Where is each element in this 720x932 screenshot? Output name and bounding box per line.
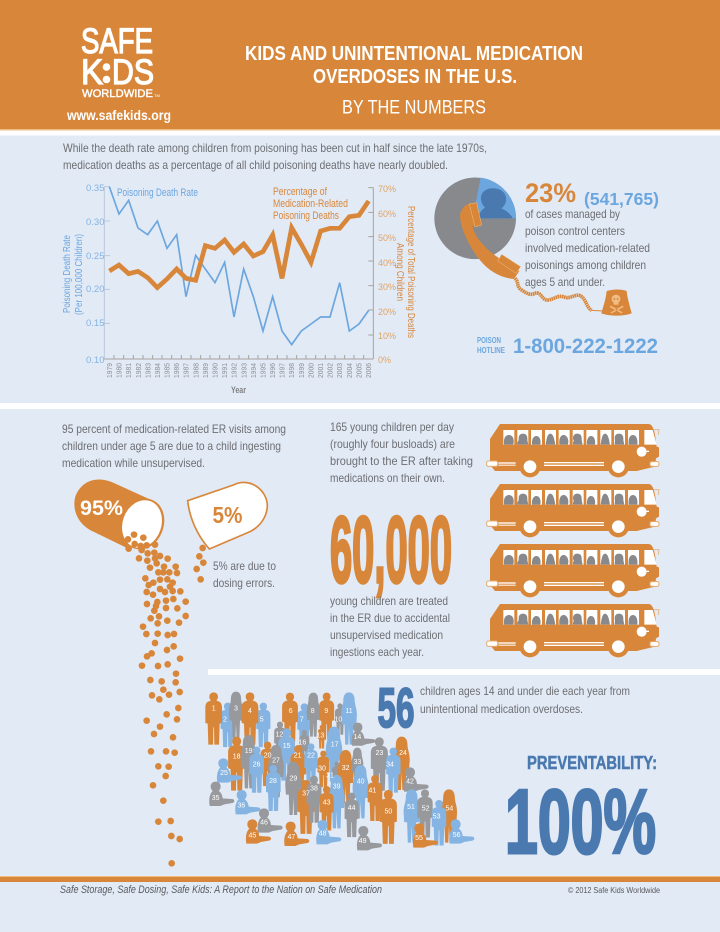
stat: 56: 56 bbox=[378, 676, 414, 739]
spilled dots bbox=[125, 531, 207, 669]
intro text: medication deaths as a percentage of all child poisoning deaths have nearly doubled. bbox=[63, 158, 448, 172]
child number labels: 29 bbox=[289, 776, 297, 783]
year labels: 2004 bbox=[345, 363, 354, 378]
icon: pills spilling bbox=[74, 479, 267, 867]
left axis tick labels: 0.25 bbox=[86, 251, 104, 262]
year labels: 2006 bbox=[364, 363, 373, 378]
title: KIDS AND UNINTENTIONAL MEDICATION bbox=[245, 42, 583, 65]
text: dosing errors: 5% are due to bbox=[213, 559, 276, 573]
poison hotline: HOTLINE bbox=[477, 345, 505, 355]
year labels: 1984 bbox=[153, 363, 162, 378]
icon: phone cord bbox=[515, 278, 592, 310]
year labels: 1987 bbox=[182, 363, 191, 378]
icon: child head bbox=[478, 188, 513, 218]
year labels: 1991 bbox=[220, 363, 229, 378]
year labels: 1985 bbox=[163, 363, 172, 378]
citation: Safe Storage, Safe Dosing, Safe Kids: A Report to the Nation on Safe Medication bbox=[60, 884, 382, 896]
text: 95 percent bbox=[62, 422, 286, 470]
icon: bus 1 bbox=[487, 424, 659, 477]
year labels: 1983 bbox=[143, 363, 152, 378]
series label: medication: Medication-Related bbox=[273, 198, 348, 210]
right axis tick labels: 50% bbox=[378, 233, 396, 243]
right axis tick labels: 60% bbox=[378, 209, 396, 219]
orange capsule half bbox=[74, 479, 171, 556]
logo: Safe Kids Worldwide: WORLDWIDE bbox=[82, 88, 153, 100]
child number labels: 17 bbox=[331, 742, 339, 749]
child number labels: 47 bbox=[287, 834, 295, 841]
lower divider bbox=[208, 669, 720, 675]
child number labels: 52 bbox=[422, 805, 430, 812]
year labels: 1990 bbox=[210, 363, 220, 378]
pie chart with phone illustration bbox=[434, 177, 632, 316]
x axis title: Year bbox=[231, 385, 246, 396]
text: 95 percent: children under age 5 are due to a child ingesting bbox=[62, 439, 281, 453]
text: 95 percent: medication while unsupervised. bbox=[62, 456, 205, 470]
year labels: 1999 bbox=[297, 363, 306, 378]
text: 60,000 description: unsupervised medication bbox=[330, 628, 443, 642]
child number labels: 18 bbox=[233, 753, 241, 760]
child number labels: 43 bbox=[323, 800, 331, 807]
right axis tick labels: 30% bbox=[378, 282, 396, 292]
text: 60,000 description: ingestions each year. bbox=[330, 645, 424, 659]
left axis title bbox=[62, 234, 85, 315]
child number labels: 53 bbox=[433, 813, 441, 820]
left axis tick labels: 0.35 bbox=[86, 183, 104, 194]
copyright: © 2012 Safe Kids Worldwide bbox=[568, 886, 660, 895]
right axis tick labels: 20% bbox=[378, 307, 396, 317]
children figures bbox=[205, 692, 474, 850]
child number labels: 48 bbox=[319, 831, 327, 838]
child number labels: 38 bbox=[310, 786, 318, 793]
child number labels: 28 bbox=[269, 778, 277, 785]
chart axes bbox=[104, 187, 373, 359]
child number labels: 40 bbox=[357, 778, 365, 785]
text: 60,000 bbox=[330, 497, 452, 602]
series label: medication bbox=[273, 186, 348, 222]
logo: Safe Kids Worldwide: TM bbox=[154, 93, 160, 98]
text: 95 percent: 95 percent of medication-related ER visits among bbox=[62, 422, 286, 436]
white capsule half bbox=[188, 482, 267, 549]
year labels: 1995 bbox=[258, 363, 268, 378]
heading: preventability: PREVENTABILITY: bbox=[527, 753, 657, 773]
text: 165 young children: (roughly four busloads) are bbox=[330, 437, 455, 451]
child number labels: 44 bbox=[348, 805, 356, 812]
left axis tick labels bbox=[86, 183, 104, 366]
year labels: 1988 bbox=[191, 363, 200, 378]
text: dosing errors bbox=[213, 559, 276, 590]
icon: bus 2 bbox=[487, 484, 659, 537]
year labels bbox=[105, 363, 373, 378]
right axis title: Percentage of Total Poisoning Deaths bbox=[405, 206, 416, 338]
left axis tick labels: 0.10 bbox=[86, 355, 104, 366]
child number labels: 11 bbox=[345, 708, 353, 715]
child number labels: 5 bbox=[260, 717, 264, 724]
text: 165 young children: medications on their own. bbox=[330, 471, 445, 485]
child number labels: 1 bbox=[212, 706, 216, 713]
label: 95%: 95% bbox=[80, 497, 123, 520]
right axis tick labels: 10% bbox=[378, 331, 396, 341]
icon: bus 4 bbox=[487, 604, 659, 657]
line chart bbox=[62, 183, 416, 396]
child number labels bbox=[212, 706, 461, 845]
child number labels: 13 bbox=[316, 732, 324, 739]
left axis tick labels: 0.20 bbox=[86, 284, 104, 295]
child number labels: 50 bbox=[384, 808, 392, 815]
intro text bbox=[63, 141, 487, 172]
stat: 23%: poisonings among children bbox=[525, 258, 646, 272]
left axis title: (Per 100,000 Children) bbox=[74, 234, 85, 315]
child number labels: 4 bbox=[248, 708, 252, 715]
child number labels: 35 bbox=[212, 795, 220, 802]
right axis tick labels: 0% bbox=[378, 355, 391, 365]
child number labels: 46 bbox=[260, 819, 268, 826]
year labels: 1992 bbox=[230, 363, 239, 378]
poison hotline: 1-800-222-1222 bbox=[513, 335, 658, 358]
child number labels: 27 bbox=[272, 757, 280, 764]
logo: Safe Kids Worldwide: SAFE bbox=[81, 22, 153, 61]
year labels: 1979 bbox=[105, 363, 114, 378]
child number labels: 8 bbox=[311, 708, 315, 715]
right axis tick labels bbox=[378, 184, 396, 365]
child number labels: 21 bbox=[294, 752, 302, 759]
title: OVERDOSES IN THE U.S. bbox=[313, 65, 517, 88]
text: 56 description bbox=[420, 684, 630, 716]
year labels: 2000 bbox=[306, 363, 315, 378]
year labels: 1993 bbox=[239, 363, 248, 378]
medication-related deaths line bbox=[109, 201, 369, 288]
child number labels: 55 bbox=[415, 835, 423, 842]
left axis tick labels: 0.15 bbox=[86, 318, 104, 329]
child number labels: 10 bbox=[334, 717, 342, 724]
year labels: 1986 bbox=[172, 363, 181, 378]
stat: 23%: of cases managed by bbox=[525, 207, 620, 221]
icon: bus 3 bbox=[487, 544, 659, 597]
year labels: 2001 bbox=[316, 363, 325, 378]
child number labels: 33 bbox=[353, 759, 361, 766]
year labels: 1989 bbox=[201, 363, 210, 378]
child number labels: 3 bbox=[234, 706, 238, 713]
child number labels: 24 bbox=[399, 750, 407, 757]
child number labels: 54 bbox=[445, 805, 453, 812]
child number labels: 20 bbox=[264, 752, 272, 759]
text: 165 young children: 165 young children per day bbox=[330, 420, 454, 434]
child number labels: 39 bbox=[333, 783, 341, 790]
child number labels: 49 bbox=[359, 838, 367, 845]
child number labels: 34 bbox=[386, 761, 394, 768]
lower spilled dots bbox=[143, 670, 183, 867]
child number labels: 6 bbox=[289, 708, 293, 715]
text: 165 young children bbox=[330, 420, 473, 485]
year labels: 1981 bbox=[124, 363, 133, 378]
child number labels: 2 bbox=[223, 717, 227, 724]
year labels: 1998 bbox=[287, 363, 296, 378]
child number labels: 41 bbox=[368, 788, 376, 795]
stat: 23%: (541,765) bbox=[584, 189, 659, 209]
year labels: 1996 bbox=[268, 363, 277, 378]
child number labels: 45 bbox=[248, 833, 256, 840]
series label: medication: Percentage of bbox=[273, 186, 328, 198]
child number labels: 37 bbox=[302, 791, 310, 798]
right axis title bbox=[394, 206, 416, 338]
year labels: 1982 bbox=[134, 363, 143, 378]
stat: 23%: poison control centers bbox=[525, 224, 625, 238]
footer band bbox=[0, 876, 720, 882]
series label: death rate: Poisoning Death Rate bbox=[117, 187, 198, 199]
year labels: 1994 bbox=[249, 363, 258, 378]
child number labels: 19 bbox=[245, 748, 253, 755]
stat: 23% bbox=[525, 178, 659, 289]
child number labels: 9 bbox=[324, 708, 328, 715]
website url: www.safekids.org bbox=[66, 107, 171, 123]
stat: 23%: 23% bbox=[525, 178, 576, 208]
year labels: 2003 bbox=[335, 363, 344, 378]
year labels: 1997 bbox=[278, 363, 287, 378]
right axis tick labels: 40% bbox=[378, 258, 396, 268]
year labels: 1980 bbox=[115, 363, 124, 378]
icon: phone base with skull bbox=[601, 289, 632, 316]
poison hotline: POISON bbox=[477, 335, 501, 345]
child number labels: 14 bbox=[353, 734, 361, 741]
text: 60,000 description: in the ER due to accidental bbox=[330, 611, 450, 625]
child number labels: 30 bbox=[318, 766, 326, 773]
child number labels: 36 bbox=[237, 803, 245, 810]
text: 60,000 description bbox=[330, 594, 450, 659]
child number labels: 12 bbox=[275, 732, 283, 739]
text: 60,000 description: young children are treated bbox=[330, 594, 448, 608]
pie chart 23% bbox=[434, 177, 516, 259]
text: dosing errors: dosing errors. bbox=[213, 576, 275, 590]
year labels: 2005 bbox=[354, 363, 363, 378]
intro text: While the death rate among children from poisoning has been cut in half since the late 1970s, bbox=[63, 141, 487, 155]
text: 165 young children: brought to the ER after taking bbox=[330, 454, 473, 468]
left axis title: Poisoning Death Rate bbox=[62, 235, 73, 313]
child number labels: 16 bbox=[298, 739, 306, 746]
child number labels: 32 bbox=[342, 765, 350, 772]
child number labels: 23 bbox=[375, 750, 383, 757]
icon: phone handset bbox=[460, 203, 521, 279]
child number labels: 15 bbox=[283, 743, 291, 750]
header band bbox=[0, 0, 720, 136]
section divider bbox=[0, 403, 720, 409]
child number labels: 56 bbox=[453, 832, 461, 839]
text: 56 description: children ages 14 and under die each year from bbox=[420, 684, 630, 698]
text: 56 description: unintentional medication overdoses. bbox=[420, 702, 583, 716]
logo: Safe Kids Worldwide bbox=[81, 22, 160, 100]
title: BY THE NUMBERS bbox=[342, 96, 486, 118]
stat: 23%: involved medication-related bbox=[525, 241, 650, 255]
label: 5%: 5% bbox=[212, 502, 242, 528]
right axis tick labels: 70% bbox=[378, 184, 396, 194]
series label: medication: Poisoning Deaths bbox=[273, 210, 339, 222]
child number labels: 7 bbox=[300, 717, 304, 724]
child number labels: 31 bbox=[326, 772, 334, 779]
year labels: 2002 bbox=[326, 363, 335, 378]
title bbox=[245, 42, 583, 118]
stat: 23%: ages 5 and under. bbox=[525, 275, 605, 289]
child number labels: 22 bbox=[307, 753, 315, 760]
logo: Safe Kids Worldwide: K bbox=[81, 53, 103, 92]
logo: Safe Kids Worldwide: DS bbox=[112, 53, 154, 92]
child number labels: 25 bbox=[220, 770, 228, 777]
poisoning death rate line bbox=[109, 187, 369, 345]
child number labels: 51 bbox=[407, 804, 415, 811]
left axis tick labels: 0.30 bbox=[86, 217, 104, 228]
right axis title: Among Children bbox=[394, 243, 405, 301]
child number labels: 26 bbox=[253, 761, 261, 768]
child number labels: 42 bbox=[406, 778, 414, 785]
